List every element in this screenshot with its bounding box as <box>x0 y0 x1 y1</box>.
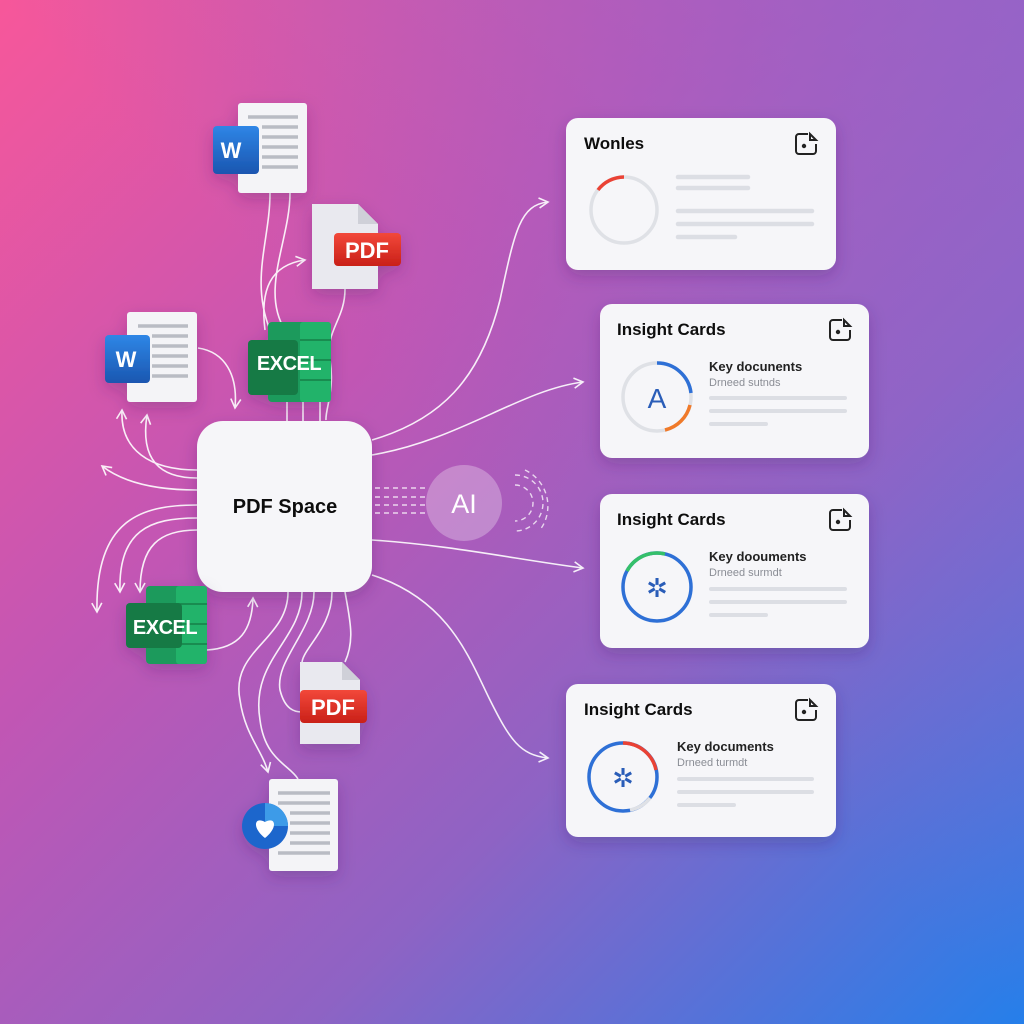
icon: word document left <box>105 312 197 402</box>
panel: card 1 Wonles: Wonles <box>584 134 644 153</box>
icon: excel top <box>248 322 331 402</box>
icon: excel bottom: EXCEL <box>133 617 197 639</box>
connector curves <box>97 193 583 779</box>
icon: card export <box>796 134 816 154</box>
panel: card 3 Insight Cards <box>600 494 869 648</box>
icon: pdf document bottom <box>300 662 367 744</box>
icon: pdf document top: PDF <box>345 238 389 263</box>
icon: word document left: W <box>116 347 137 372</box>
panel: card 3 Insight Cards: Key doouments <box>709 549 807 564</box>
panel: card 1 Wonles <box>566 118 836 270</box>
panel: card 2 Insight Cards: Key docunents <box>709 359 802 374</box>
panel: card 3 Insight Cards: Drneed surmdt <box>709 567 782 579</box>
panel: card 2 Insight Cards: Insight Cards <box>617 320 726 339</box>
panel: card 4 Insight Cards: Key documents <box>677 739 774 754</box>
icon: pdf document bottom: PDF <box>311 695 355 720</box>
panel: card 2 Insight Cards: A <box>648 383 667 414</box>
panel: card 2 Insight Cards <box>600 304 869 458</box>
icon: document with heart badge <box>242 779 338 871</box>
panel: card 4 Insight Cards: Drneed turmdt <box>677 757 747 769</box>
panel: card 4 Insight Cards: ✲ <box>612 763 634 793</box>
panel: card 4 Insight Cards: Insight Cards <box>584 700 693 719</box>
icon: excel top: EXCEL <box>257 353 321 375</box>
panel: card 2 Insight Cards: Drneed sutnds <box>709 377 781 389</box>
panel: PDF Space hub <box>197 421 372 592</box>
panel: card 3 Insight Cards: Insight Cards <box>617 510 726 529</box>
icon: word document top: W <box>221 138 242 163</box>
icon: pdf document top <box>312 204 401 289</box>
icon: AI circle <box>375 465 548 541</box>
panel: card 4 Insight Cards <box>566 684 836 837</box>
panel: PDF Space hub: PDF Space <box>233 496 337 518</box>
icon: excel bottom <box>126 586 207 664</box>
icon: AI circle: AI <box>451 489 477 519</box>
icon: word document top <box>213 103 307 193</box>
panel: card 3 Insight Cards: ✲ <box>646 573 668 603</box>
